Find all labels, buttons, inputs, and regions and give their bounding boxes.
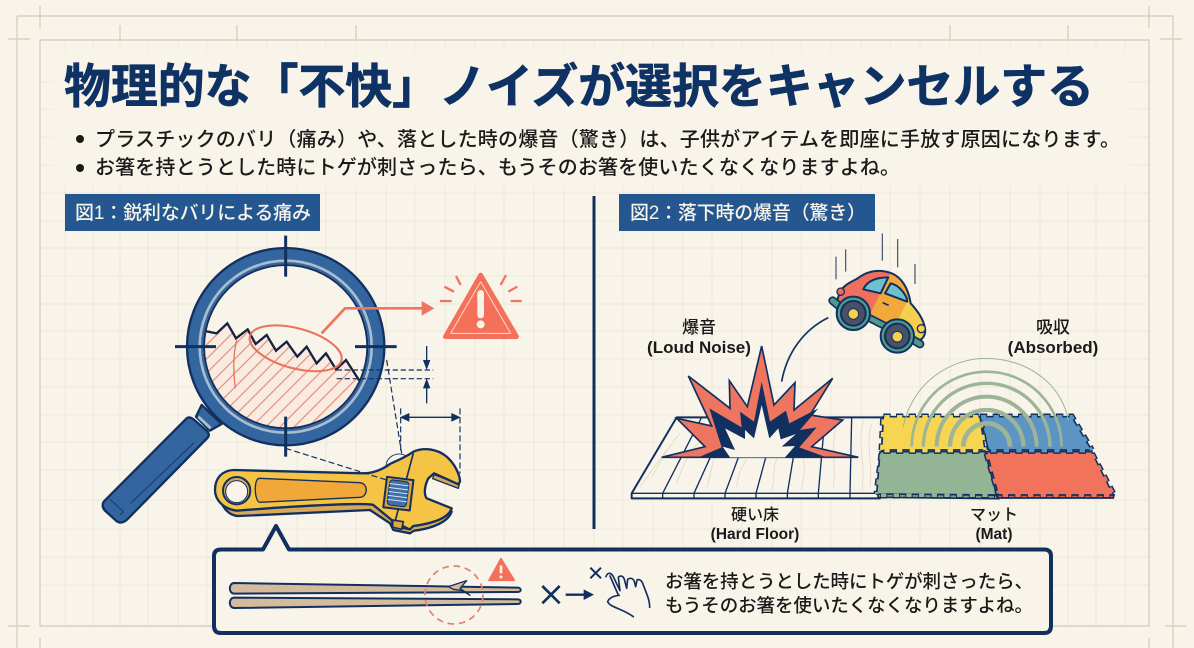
callout: chopstick example xyxy=(214,526,1051,633)
bullet 1: プラスチックのバリ（痛み）や、落とした時の爆音（驚き）は、子供がアイテムを即座に手放す原因になります。 xyxy=(95,128,1120,151)
mat tile: coral xyxy=(987,452,1114,498)
callout text: もうそのお箸を使いたくなくなりますよね。 xyxy=(665,595,1033,616)
icon: warning triangle xyxy=(440,275,522,337)
callout text: お箸を持とうとした時にトゲが刺さったら、 xyxy=(665,571,1033,592)
label: absorbed: (Absorbed) xyxy=(1008,338,1098,357)
label: absorbed xyxy=(1008,318,1098,357)
icon: explosion xyxy=(662,346,858,457)
icon: magnifying glass xyxy=(103,236,397,523)
hard wood floor xyxy=(632,417,883,498)
panel: figure 1 heading: 図1：鋭利なバリによる痛み xyxy=(75,202,311,224)
panel: figure 2 heading xyxy=(619,194,875,231)
icon: small warning xyxy=(489,559,514,580)
motion lines xyxy=(836,233,915,284)
label: hard floor: 硬い床 xyxy=(731,506,779,524)
lens xyxy=(204,265,367,428)
label: hard floor: (Hard Floor) xyxy=(711,526,799,543)
label: absorbed: 吸収 xyxy=(1036,318,1070,337)
label: loud noise: (Loud Noise) xyxy=(647,338,751,357)
bullet 2: お箸を持とうとした時にトゲが刺さったら、もうそのお箸を使いたくなくなりますよね。 xyxy=(95,156,900,179)
icon: adjustable wrench xyxy=(215,449,460,533)
mat tile: yellow xyxy=(882,417,985,451)
dimension lines xyxy=(286,346,460,480)
sound absorbing arcs xyxy=(903,358,1068,447)
icon: toy car xyxy=(833,271,925,353)
callout box xyxy=(214,526,1051,633)
label: loud noise: 爆音 xyxy=(682,318,716,337)
callout text xyxy=(665,571,1033,616)
icon: chopsticks with splinter xyxy=(230,566,521,624)
mat tile: blue xyxy=(980,417,1092,451)
label: hard floor xyxy=(711,506,799,543)
panel: figure 2 illustration xyxy=(632,233,1114,499)
ring xyxy=(195,256,377,438)
panel: figure 2 heading: 図2：落下時の爆音（驚き） xyxy=(630,202,866,224)
text block: bullet points xyxy=(76,128,1120,179)
curved impact trail xyxy=(782,318,828,382)
panel: figure 1 illustration xyxy=(103,236,522,533)
burr cross-section xyxy=(205,322,360,428)
icon: x and arrow xyxy=(542,568,601,603)
panel: figure 1 heading xyxy=(65,194,320,231)
puzzle mat xyxy=(877,417,1114,499)
divider between figures xyxy=(592,196,596,529)
callout ellipse and arrow to warning xyxy=(245,301,434,380)
title: 物理的な「不快」ノイズが選択をキャンセルする xyxy=(64,60,1094,113)
label: mat xyxy=(970,507,1018,543)
mat tile: green xyxy=(877,452,998,499)
handle xyxy=(103,405,222,523)
icon: hand pulling away xyxy=(606,573,650,617)
label: mat: (Mat) xyxy=(975,526,1013,543)
label: mat: マット xyxy=(970,507,1018,524)
label: loud noise xyxy=(647,318,751,357)
